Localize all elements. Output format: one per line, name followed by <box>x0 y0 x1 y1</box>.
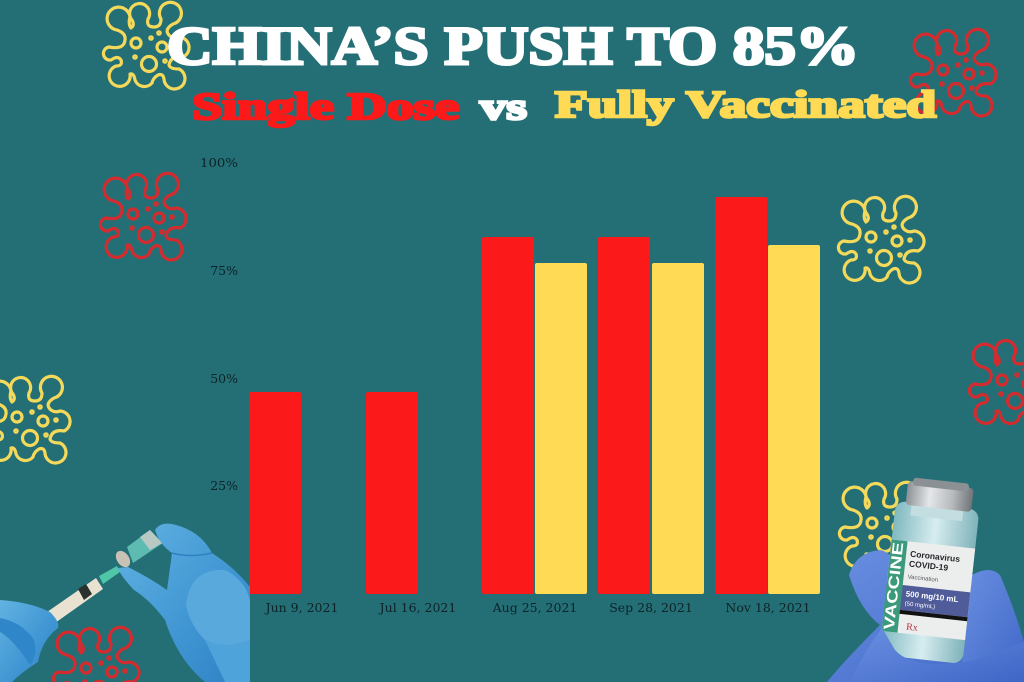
y axis labels: 100% <box>200 155 238 170</box>
photo: vaccine vial in blue glove <box>827 476 1024 682</box>
y axis labels: 75% <box>210 263 238 278</box>
photo: syringe and vial in gloved hands <box>0 524 250 682</box>
bar group: Sep 28, 2021 <box>598 237 704 594</box>
vial label <box>882 539 975 640</box>
x axis labels: Jun 9, 2021 <box>264 600 338 615</box>
bar group: Aug 25, 2021 <box>482 237 587 594</box>
legend label: fully vaccinated: Fully Vaccinated <box>555 84 936 126</box>
legend label: single dose: Single Dose <box>192 86 459 128</box>
virus icon: red top right <box>910 29 996 116</box>
virus icon: red far right <box>969 339 1024 426</box>
vial <box>113 530 163 570</box>
vial cap <box>906 481 974 512</box>
virus icon: yellow left <box>0 376 70 463</box>
vial body: (50 mg/mL) <box>904 601 935 611</box>
x axis labels: Jul 16, 2021 <box>378 600 456 615</box>
vial body: COVID-19 <box>909 559 949 573</box>
right glove <box>118 524 250 682</box>
syringe <box>24 566 120 640</box>
bar group: Jul 16, 2021 <box>366 392 418 594</box>
bar chart <box>249 197 820 594</box>
x axis labels <box>264 600 811 615</box>
y axis labels: 25% <box>210 478 238 493</box>
vial body: Rx <box>906 622 918 634</box>
vial body: VACCINE <box>881 541 907 631</box>
left glove <box>0 600 58 682</box>
virus icon: yellow top left <box>103 2 189 89</box>
y axis labels <box>200 155 238 493</box>
legend label: vs: vs <box>480 86 527 128</box>
y axis labels: 50% <box>210 371 238 386</box>
virus icon: red left <box>100 173 186 260</box>
x axis labels: Sep 28, 2021 <box>609 600 693 615</box>
virus icon: red bottom left <box>53 627 139 682</box>
title: CHINA’S PUSH TO 85% <box>167 16 859 76</box>
bar group: Nov 18, 2021 <box>715 197 820 594</box>
virus icon: yellow right <box>838 196 924 283</box>
bar group: Jun 9, 2021 <box>249 392 301 594</box>
x axis labels: Aug 25, 2021 <box>492 600 577 615</box>
vial body: Coronavirus <box>910 549 961 564</box>
virus icon: yellow bottom right <box>839 482 925 569</box>
x axis labels: Nov 18, 2021 <box>725 600 811 615</box>
back glove <box>827 550 1024 682</box>
vial body: Vaccination <box>907 574 938 584</box>
vial body <box>878 476 982 664</box>
vial body: 500 mg/10 mL <box>905 589 959 604</box>
front fingers <box>850 628 1024 682</box>
